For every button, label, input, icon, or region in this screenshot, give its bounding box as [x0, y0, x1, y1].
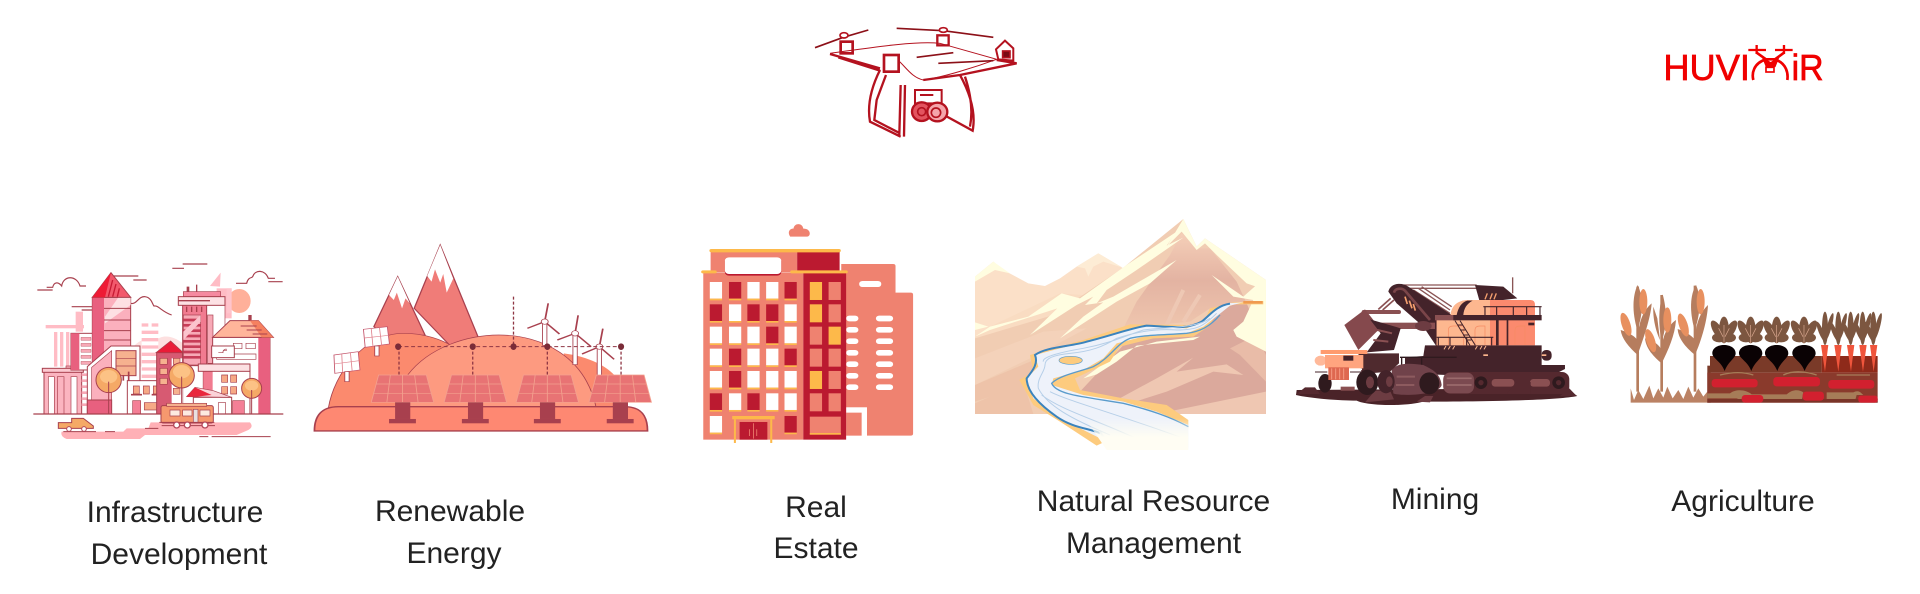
rocks — [1297, 387, 1320, 394]
panel: renewable energy — [314, 245, 651, 570]
panel: real estate — [701, 224, 913, 565]
road — [61, 422, 252, 439]
dashed connections — [398, 297, 621, 375]
back mountain — [975, 253, 1137, 414]
label: renewable energy — [375, 495, 525, 570]
label: infrastructure development: Infrastructure — [87, 496, 263, 529]
tree 2 — [169, 363, 194, 388]
corn plant 1 — [1618, 285, 1652, 392]
red patches — [1712, 377, 1878, 403]
panel: agriculture — [1618, 285, 1884, 518]
label: infrastructure development: Development — [91, 538, 268, 571]
panel: natural resource management — [975, 219, 1270, 560]
truck — [1358, 353, 1399, 374]
striped block — [71, 333, 93, 370]
label: natural resource management: Management — [1066, 527, 1242, 560]
arm — [1377, 323, 1435, 329]
illustration: crops and soil — [1618, 285, 1884, 403]
main mountain — [975, 219, 1266, 414]
bucket — [1344, 309, 1380, 350]
river banks — [1019, 301, 1263, 446]
cables — [1403, 285, 1477, 313]
central tower — [202, 305, 225, 365]
label: real estate: Real — [785, 491, 847, 524]
background shapes — [46, 273, 232, 367]
glass building — [87, 346, 140, 414]
label: natural resource management — [1037, 485, 1270, 560]
label: renewable energy: Renewable — [375, 495, 525, 528]
tall tower — [92, 297, 131, 414]
windows — [710, 282, 797, 433]
sign — [212, 346, 234, 358]
lower roof house — [193, 397, 232, 414]
cab — [1437, 300, 1535, 345]
ground line — [33, 412, 283, 416]
grass — [1631, 386, 1707, 403]
label: infrastructure development — [87, 496, 268, 571]
boom — [1388, 284, 1452, 347]
main tower — [703, 273, 803, 440]
red roof building — [157, 353, 183, 414]
tree — [96, 367, 121, 393]
label: natural resource management: Natural Resource — [1037, 485, 1270, 518]
beets — [1712, 345, 1816, 371]
label: mining: Mining — [1391, 483, 1479, 516]
river fade — [1085, 418, 1188, 450]
side column windows — [810, 282, 841, 435]
clouds and air lines — [37, 264, 283, 315]
panel: mining — [1296, 277, 1577, 516]
illustration: excavator and truck — [1296, 277, 1577, 405]
carrot foliage — [1815, 312, 1884, 345]
turbines — [527, 303, 614, 381]
truck — [58, 418, 93, 431]
logo icon: drone — [1748, 45, 1793, 80]
label: real estate: Estate — [773, 532, 859, 565]
base ground — [314, 407, 648, 431]
drone illustration — [815, 28, 1017, 137]
illustration: solar and wind — [314, 245, 651, 431]
solar panels — [371, 375, 651, 423]
corn plant 2 — [1643, 294, 1676, 392]
panel: infrastructure development — [33, 264, 283, 571]
left building — [44, 371, 82, 414]
label: agriculture: Agriculture — [1671, 485, 1815, 518]
tree 3 — [242, 378, 262, 398]
corn plant 3 — [1675, 285, 1708, 392]
logo text: HUVI: HUVI — [1663, 47, 1750, 88]
door — [740, 422, 767, 440]
river — [1027, 302, 1243, 448]
soil layers — [1710, 356, 1822, 373]
rear building — [841, 264, 913, 436]
small boards — [334, 352, 360, 373]
label: real estate — [773, 491, 859, 565]
bus — [159, 403, 214, 428]
logo text: iR: iR — [1792, 47, 1824, 88]
beet foliage — [1708, 317, 1820, 343]
cab top — [1475, 285, 1517, 303]
illustration: mountains and river — [975, 219, 1266, 450]
mid building — [203, 371, 250, 414]
logo: HUVIAiR — [1663, 45, 1824, 88]
illustration: city — [33, 264, 283, 439]
ground — [1296, 388, 1577, 405]
label: renewable energy: Energy — [406, 537, 502, 570]
right house — [213, 337, 270, 414]
chassis — [1405, 345, 1565, 375]
crawlers — [1392, 364, 1442, 395]
snow — [975, 219, 1266, 378]
shop — [127, 381, 165, 414]
illustration: buildings — [701, 224, 913, 443]
cloud — [789, 224, 810, 237]
carrots — [1821, 345, 1877, 372]
